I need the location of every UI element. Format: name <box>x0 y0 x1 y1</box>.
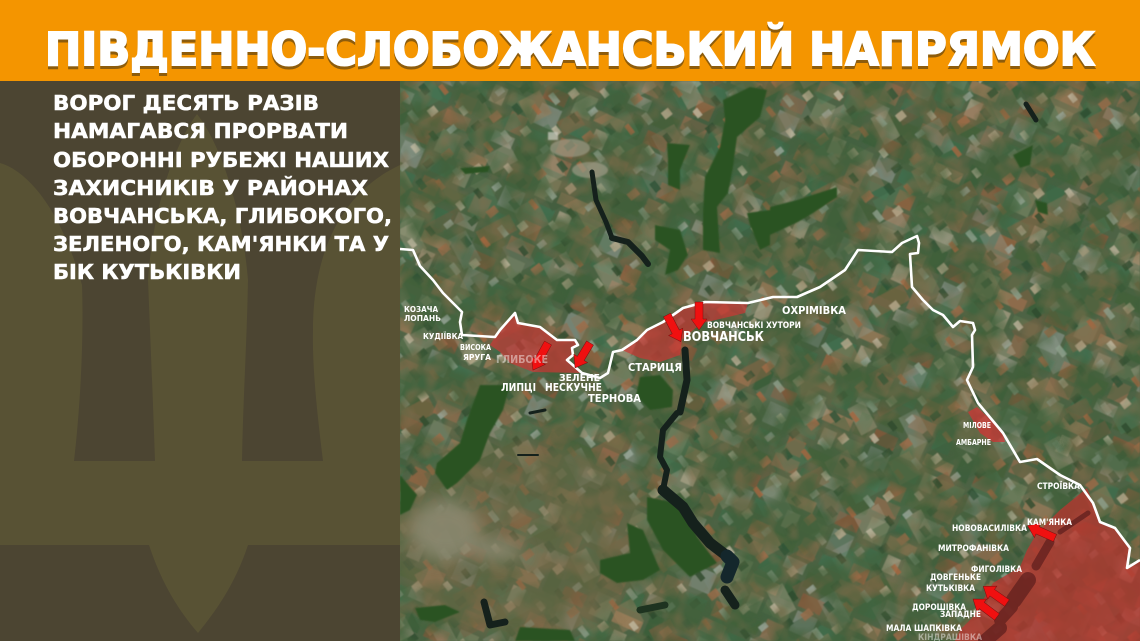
satellite map <box>390 81 1140 641</box>
place labels: ФИГОЛІВКА <box>971 565 1022 575</box>
place labels: ТЕРНОВА <box>588 392 641 405</box>
urban area: Kharkiv <box>409 500 523 560</box>
description text: БІК КУТЬКІВКИ <box>53 260 241 284</box>
place labels: ВИСОКА <box>460 343 492 352</box>
title shadow: ПІВДЕННО-СЛОБОЖАНСЬКИЙ НАПРЯМОК <box>45 26 1095 79</box>
description text: ВОВЧАНСЬКА, ГЛИБОКОГО, <box>53 204 392 228</box>
title banner <box>0 0 1140 81</box>
description text: ВОРОГ ДЕСЯТЬ РАЗІВ <box>53 91 319 115</box>
occupied zone: south-east <box>955 488 1140 641</box>
place labels: КОЗАЧА <box>404 305 439 314</box>
place labels: ЛОПАНЬ <box>404 314 441 323</box>
place labels: ВОВЧАНСЬК <box>683 329 764 345</box>
place labels <box>404 305 1080 641</box>
description text: ЗЕЛЕНОГО, КАМ'ЯНКИ ТА У <box>53 232 389 256</box>
urban area: Bilhorod <box>548 132 608 178</box>
place labels: ГЛИБОКЕ <box>496 354 548 366</box>
place labels: ЗАПАДНЕ <box>940 610 981 620</box>
attack arrows <box>526 302 1058 623</box>
place labels: ЛИПЦІ <box>501 382 536 394</box>
arrow: towards Lyptsi <box>526 339 555 374</box>
regional tint: browner south-west <box>390 440 650 640</box>
trident emblem watermark <box>0 114 400 633</box>
place labels: ВОВЧАНСЬКІ ХУТОРИ <box>707 321 801 331</box>
left panel <box>0 81 400 641</box>
place labels: КАМ'ЯНКА <box>1027 518 1072 528</box>
river and reservoir <box>484 104 1036 625</box>
place labels: ОХРІМІВКА <box>782 305 847 317</box>
place labels: ДОРОШІВКА <box>912 603 966 613</box>
place labels: МИТРОФАНІВКА <box>938 544 1009 554</box>
arrow: Vovchansk north <box>691 302 707 330</box>
place labels: ДОВГЕНЬКЕ <box>930 573 981 583</box>
description text: ЗАХИСНИКІВ У РАЙОНАХ <box>53 176 369 200</box>
place labels: НОВОВАСИЛІВКА <box>952 524 1027 534</box>
place labels: КУДІЇВКА <box>423 331 464 341</box>
front line <box>400 236 1140 568</box>
place labels: СТРОЇВКА <box>1037 481 1080 492</box>
description text <box>53 91 392 284</box>
occupied zone: Starytsia and Vovchansk <box>622 302 748 362</box>
arrow: Kutkivka <box>979 580 1012 610</box>
arrow: towards Zelene <box>568 339 597 372</box>
place labels: ЗЕЛЕНЕ <box>559 373 600 384</box>
place labels: НЕСКУЧНЕ <box>545 382 602 394</box>
arrow: Kamianka <box>1024 518 1058 545</box>
arrow: Doroshivka <box>968 593 1002 623</box>
occupied zone: Hlyboke <box>490 313 582 373</box>
place labels: КУТЬКІВКА <box>926 584 975 594</box>
forests <box>400 87 1048 641</box>
place labels: АМБАРНЕ <box>956 438 991 447</box>
occupied zone: Milove <box>968 407 1005 442</box>
place labels: МАЛА ШАПКІВКА <box>886 624 962 634</box>
description text: НАМАГАВСЯ ПРОРВАТИ <box>53 119 348 143</box>
description text: ОБОРОННІ РУБЕЖІ НАШИХ <box>53 148 390 172</box>
arrow: Vovchansk west <box>660 311 688 345</box>
place labels: ЯРУГА <box>463 353 492 362</box>
place labels: МІЛОВЕ <box>963 421 991 430</box>
title: ПІВДЕННО-СЛОБОЖАНСЬКИЙ НАПРЯМОК <box>45 23 1095 76</box>
place labels: СТАРИЦЯ <box>628 361 682 374</box>
